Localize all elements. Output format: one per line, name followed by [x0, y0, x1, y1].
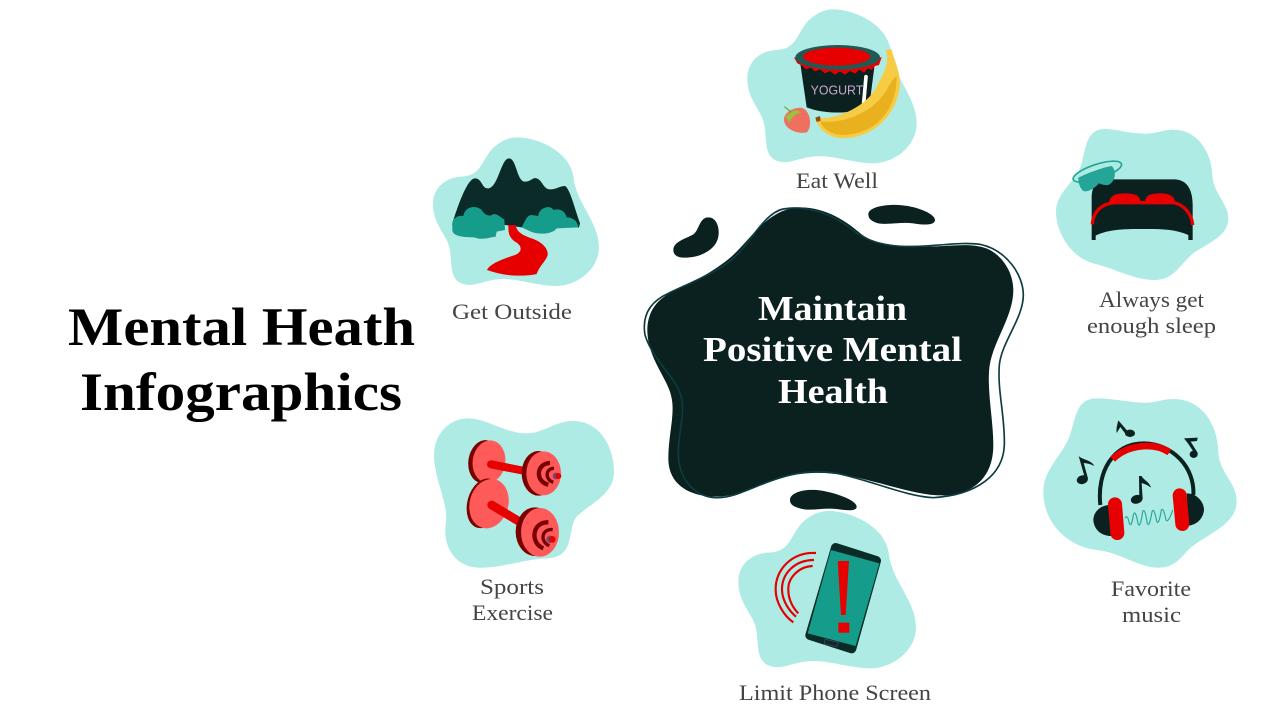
- panel: phone: [738, 511, 931, 705]
- label: sleep: [1087, 287, 1216, 338]
- icon: mountain landscape with river: [452, 158, 580, 276]
- panel: music: [1043, 398, 1237, 627]
- label: sports: Exercise: [472, 600, 553, 625]
- label: music: music: [1122, 602, 1181, 627]
- title: [68, 297, 415, 422]
- label: get outside: Get Outside: [452, 299, 572, 324]
- sleep backdrop: [1056, 129, 1228, 280]
- small blob top: [868, 205, 935, 225]
- get outside backdrop: [433, 137, 599, 286]
- label: sleep: Always get: [1099, 287, 1204, 312]
- icon: headphones and notes: [1076, 420, 1204, 536]
- central heading: [703, 289, 962, 411]
- label: eat well: Eat Well: [796, 168, 878, 193]
- icon: bed with sleep mask: [1071, 157, 1193, 240]
- label: sleep: enough sleep: [1087, 313, 1216, 338]
- panel: eat well: [747, 9, 917, 193]
- label: phone: Limit Phone Screen: [739, 680, 931, 705]
- central heading: Health: [778, 372, 888, 411]
- label: sports: [472, 574, 553, 625]
- title: Mental Heath: [68, 297, 415, 357]
- music backdrop: [1043, 398, 1237, 568]
- central blob fill: [647, 207, 1013, 497]
- central heading: Maintain: [758, 289, 907, 328]
- label: music: Favorite: [1111, 576, 1191, 601]
- eat well backdrop: [747, 9, 917, 163]
- label: sports: Sports: [480, 574, 544, 599]
- panel: sports: [434, 418, 614, 625]
- small blob left: [673, 217, 719, 258]
- title: Infographics: [80, 362, 402, 422]
- phone backdrop: [738, 511, 916, 668]
- label: music: [1111, 576, 1191, 627]
- panel: sleep: [1056, 129, 1228, 338]
- icon: yogurt, banana and strawberry: [784, 45, 900, 138]
- sports backdrop: [434, 418, 614, 568]
- central blob group: [644, 205, 1023, 510]
- icon: dumbbells: [461, 438, 561, 557]
- panel: get outside: [433, 137, 599, 324]
- icon: phone with alert: [776, 548, 879, 649]
- central blob outline: [644, 208, 1023, 498]
- icon: yogurt, banana and strawberry: YOGURT: [811, 83, 863, 98]
- small blob bottom: [790, 490, 857, 510]
- central heading: Positive Mental: [703, 330, 962, 369]
